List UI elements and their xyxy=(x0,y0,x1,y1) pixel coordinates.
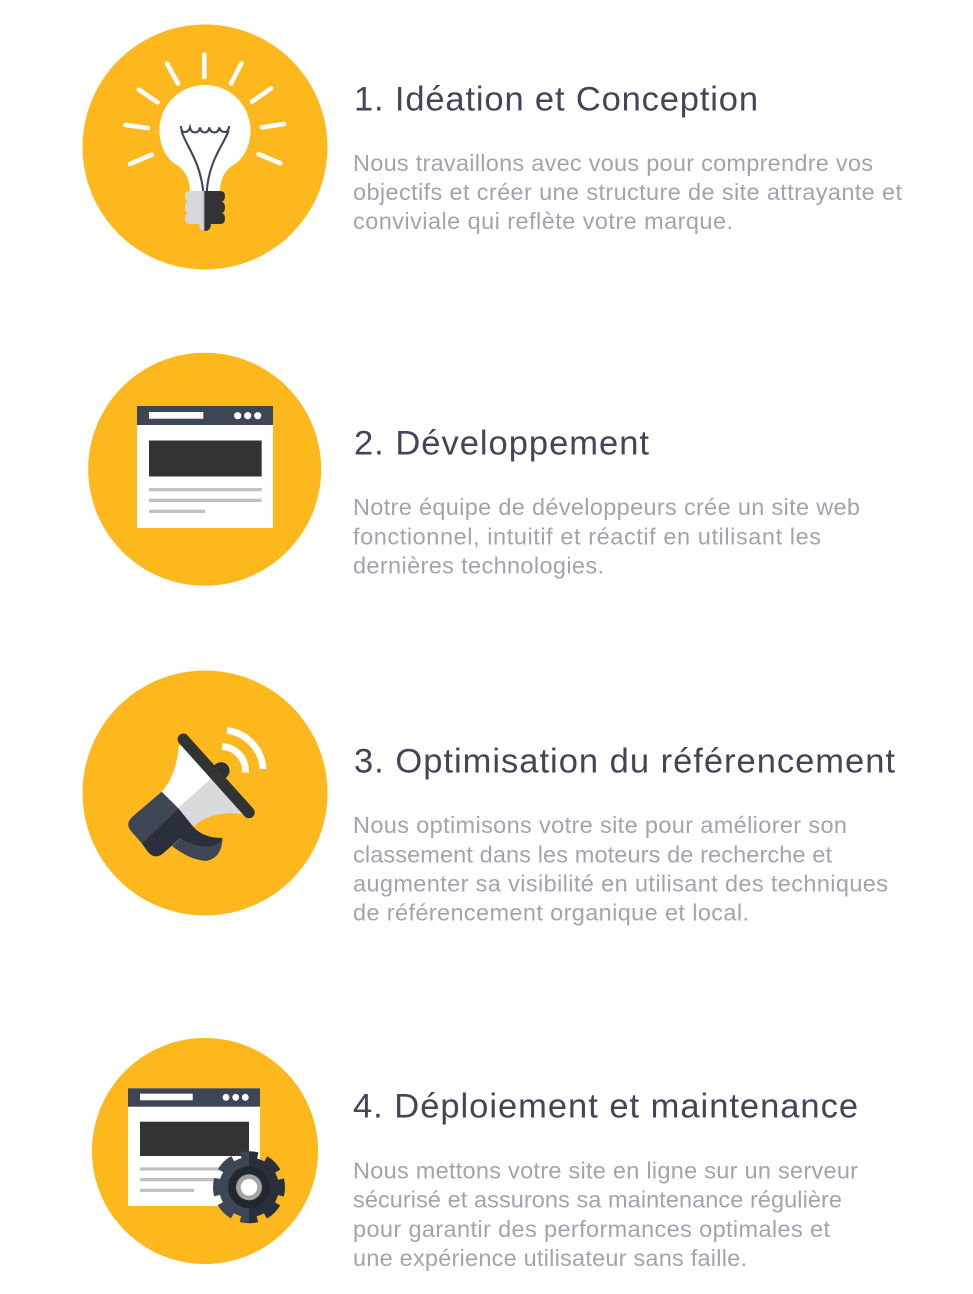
gear xyxy=(216,1155,282,1220)
description 2: dernières technologies. xyxy=(353,552,604,578)
description 4: pour garantir des performances optimales et xyxy=(353,1216,830,1242)
heading 2: 2. Développement xyxy=(354,424,649,462)
icon circle 3 xyxy=(82,670,328,916)
description 4: Nous mettons votre site en ligne sur un serveur xyxy=(353,1157,858,1183)
description 1: conviviale qui reflète votre marque. xyxy=(353,208,733,234)
icon circle 1 xyxy=(82,24,328,270)
step 3: optimisation icon xyxy=(82,670,328,916)
step 4: déploiement icon xyxy=(92,1038,318,1264)
description 4: sécurisé et assurons sa maintenance régulière xyxy=(353,1187,842,1213)
step 2: text xyxy=(353,424,860,578)
description 3: augmenter sa visibilité en utilisant des techniques xyxy=(353,870,888,896)
bulb glass xyxy=(160,85,250,193)
bulb base xyxy=(185,191,225,231)
step 1: text xyxy=(353,80,902,234)
heading 4: 4. Déploiement et maintenance xyxy=(353,1088,858,1126)
description 1: Nous travaillons avec vous pour comprendre vos xyxy=(353,150,873,176)
description 3: Nous optimisons votre site pour améliorer son xyxy=(353,812,847,838)
description 2 xyxy=(353,494,860,578)
step 2: développement icon xyxy=(88,353,321,586)
sound waves xyxy=(222,730,263,772)
description 3: de référencement organique et local. xyxy=(353,900,749,926)
browser window xyxy=(137,406,273,528)
step 4: text xyxy=(353,1088,858,1271)
step 3: text xyxy=(353,742,895,926)
filament xyxy=(181,126,229,192)
description 3 xyxy=(353,812,888,926)
heading 3: 3. Optimisation du référencement xyxy=(354,742,895,780)
description 2: Notre équipe de développeurs crée un site web xyxy=(353,494,860,520)
icon circle 2 xyxy=(88,353,321,586)
step 1: idéation icon xyxy=(82,24,328,270)
description 2: fonctionnel, intuitif et réactif en utilisant les xyxy=(353,523,821,549)
description 4 xyxy=(353,1157,858,1271)
heading 1: 1. Idéation et Conception xyxy=(354,80,758,118)
browser window xyxy=(128,1088,260,1206)
description 1: objectifs et créer une structure de site attrayante et xyxy=(353,179,902,205)
light rays xyxy=(126,54,284,164)
description 4: une expérience utilisateur sans faille. xyxy=(353,1245,747,1271)
description 1 xyxy=(353,150,902,234)
description 3: classement dans les moteurs de recherche et xyxy=(353,841,832,867)
icon circle 4 xyxy=(92,1038,318,1264)
megaphone xyxy=(128,739,249,861)
